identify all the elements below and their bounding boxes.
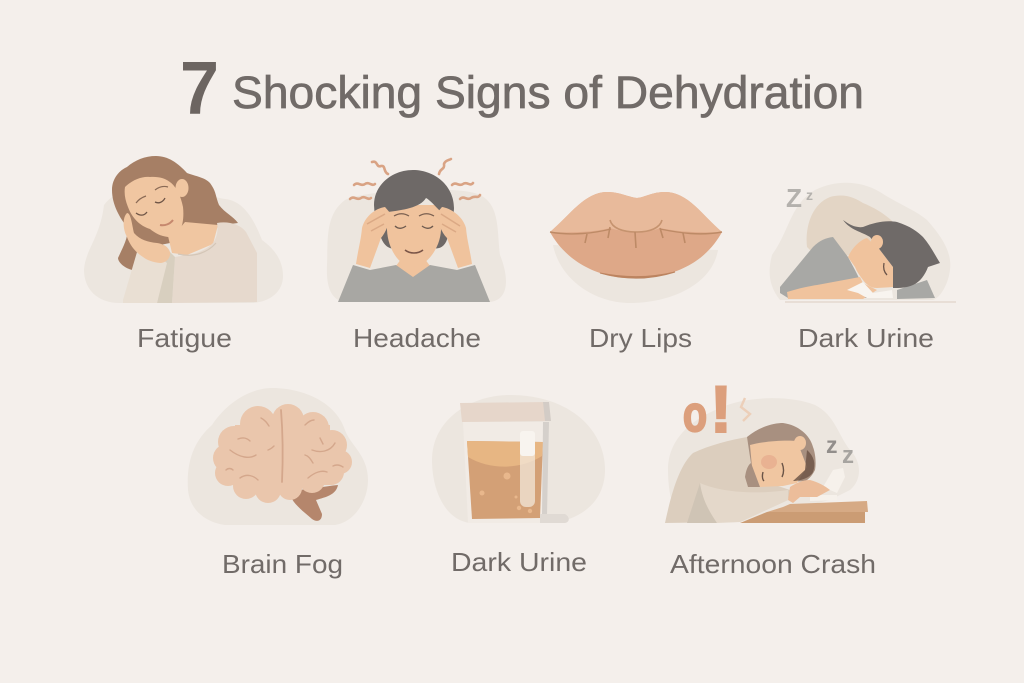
illustration: tired woman: [112, 156, 257, 303]
label: Brain Fog: [222, 549, 343, 579]
label: Fatigue: [137, 323, 232, 353]
title: [180, 46, 864, 130]
illustration: head on desk: z: [842, 442, 854, 469]
icon background blob: [668, 398, 859, 522]
panel: headache: [327, 159, 506, 353]
illustration: sleeping person: z: [806, 187, 813, 203]
icon: sleep letters: Z: [786, 183, 802, 213]
illustration: head on desk: !: [710, 372, 732, 446]
icon: brain: [213, 404, 352, 521]
panel: dark urine sleeping: [770, 183, 956, 353]
icon: alert: o: [683, 386, 707, 442]
icon background blob: [553, 245, 718, 303]
icon: desk: [740, 512, 865, 523]
illustration: head on desk: [665, 372, 868, 523]
urine cup highlight: [520, 431, 535, 507]
icon: urine cup: [460, 402, 569, 523]
label: Dark Urine: [798, 323, 934, 353]
icon: lips: [550, 192, 722, 278]
title: 7: [180, 46, 219, 130]
label: Dry Lips: [589, 323, 692, 353]
panel: fatigue: [84, 156, 283, 353]
icon: pain squiggles: [350, 159, 480, 199]
icon background blob: [84, 187, 283, 303]
icon background blob: [188, 388, 368, 525]
icon: tissue: [847, 282, 893, 298]
icon background blob: [770, 183, 950, 300]
illustration: person holding head: [338, 159, 490, 302]
panel: dark urine cup: [432, 395, 605, 577]
title: Shocking Signs of Dehydration: [232, 67, 864, 118]
panel: afternoon crash: [665, 372, 876, 579]
icon: zigzag: [741, 398, 750, 421]
illustration: sleeping person: [780, 183, 956, 302]
panel: dry lips: [550, 192, 722, 353]
label: Dark Urine: [451, 547, 587, 577]
panel: brain fog: [188, 388, 368, 579]
icon: sleep letters: z: [826, 432, 838, 458]
icon background blob: [327, 190, 506, 302]
label: Afternoon Crash: [670, 549, 876, 579]
icon background blob: [432, 395, 605, 523]
label: Headache: [353, 323, 481, 353]
